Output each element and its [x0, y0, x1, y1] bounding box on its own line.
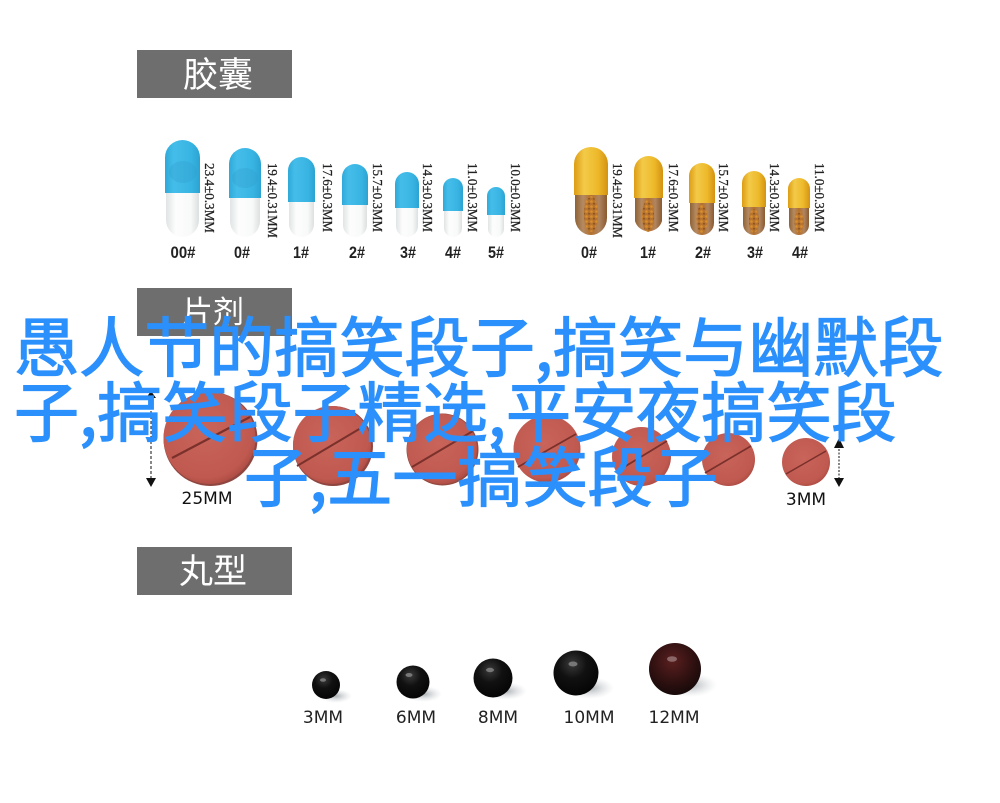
filled capsule 0#	[574, 147, 624, 262]
capsule 00#	[165, 140, 216, 262]
blue capsule size chart	[165, 140, 522, 262]
capsule 2#: 15.7±0.3MM	[369, 163, 384, 232]
size arrow: 3MM	[834, 438, 844, 487]
size arrow: 25MM	[146, 391, 156, 487]
filled capsule 2#	[689, 163, 730, 262]
filled capsule 1#: 17.6±0.3MM	[665, 163, 680, 232]
heading: tablets: 片剂	[182, 295, 244, 330]
capsule 3#: 14.3±0.3MM	[419, 163, 434, 232]
capsule 1#: 17.6±0.3MM	[319, 163, 334, 232]
pill 6MM: 6MM	[396, 708, 436, 728]
capsule 5#: 5#	[488, 243, 504, 262]
filled capsule 3#	[742, 163, 781, 262]
capsule 0#: 0#	[234, 243, 250, 262]
filled capsule 1#	[634, 156, 680, 262]
heading: capsules	[137, 50, 292, 98]
filled capsule 3#: 14.3±0.3MM	[766, 163, 781, 232]
heading: tablets	[137, 288, 292, 336]
pill 12MM	[649, 643, 717, 728]
filled capsule 2#: 15.7±0.3MM	[715, 163, 730, 232]
title line 3: 子,五一搞笑段子	[244, 426, 718, 520]
capsule 4#	[443, 163, 479, 262]
tablet 25MM	[164, 392, 258, 486]
capsule 4#: 11.0±0.3MM	[464, 163, 479, 233]
capsule 2#	[342, 163, 384, 262]
capsule 00#: 00#	[170, 243, 196, 262]
capsule 1#: 1#	[293, 243, 309, 262]
pill 8MM	[474, 658, 527, 728]
capsule 5#	[487, 163, 522, 262]
pill size chart	[303, 643, 717, 728]
pill 10MM: 10MM	[564, 708, 614, 728]
pill 3MM: 3MM	[303, 708, 343, 728]
pill 6MM	[396, 666, 442, 728]
tablet step 5	[612, 427, 671, 486]
capsule 1#	[288, 157, 334, 262]
capsule 5#: 10.0±0.3MM	[507, 163, 522, 232]
heading: capsules: 胶囊	[183, 56, 253, 95]
pill 8MM: 8MM	[478, 708, 518, 728]
capsule 3#: 3#	[400, 243, 416, 262]
capsule 0#: 19.4±0.31MM	[264, 163, 279, 238]
tablet size chart	[146, 391, 844, 510]
filled capsule 4#: 11.0±0.3MM	[811, 163, 826, 233]
filled capsule 0#: 0#	[581, 243, 597, 262]
tablet step 4	[514, 416, 580, 482]
capsule 00#: 23.4±0.3MM	[201, 163, 216, 234]
filled capsule 1#: 1#	[640, 243, 656, 262]
filled capsule 4#: 4#	[792, 243, 808, 262]
tablet step 3	[406, 414, 478, 486]
overlay title	[14, 296, 944, 520]
pill 12MM: 12MM	[649, 708, 699, 728]
capsule 0#	[229, 148, 279, 262]
tablet step 6	[702, 433, 755, 486]
filled capsule 2#: 2#	[695, 243, 711, 262]
label: 25MM: 25MM	[182, 489, 232, 509]
filled capsule 0#: 19.4±0.31MM	[609, 163, 624, 238]
tablet step 2	[293, 406, 373, 486]
filled capsule 4#	[788, 163, 826, 262]
capsule 3#	[395, 163, 434, 262]
pill 3MM	[303, 671, 352, 728]
tablet 3MM	[782, 438, 830, 486]
capsule 2#: 2#	[349, 243, 365, 262]
label: 3MM: 3MM	[786, 490, 826, 510]
filled yellow capsule size chart	[574, 147, 826, 262]
heading: pills: 丸型	[179, 553, 247, 591]
pill 10MM	[554, 650, 614, 728]
capsule 4#: 4#	[445, 243, 461, 262]
title line 1: 愚人节的搞笑段子,搞笑与幽默段	[14, 296, 944, 390]
filled capsule 3#: 3#	[747, 243, 763, 262]
heading: pills	[137, 547, 292, 595]
title line 2: 子,搞笑段子精选,平安夜搞笑段	[14, 361, 897, 455]
